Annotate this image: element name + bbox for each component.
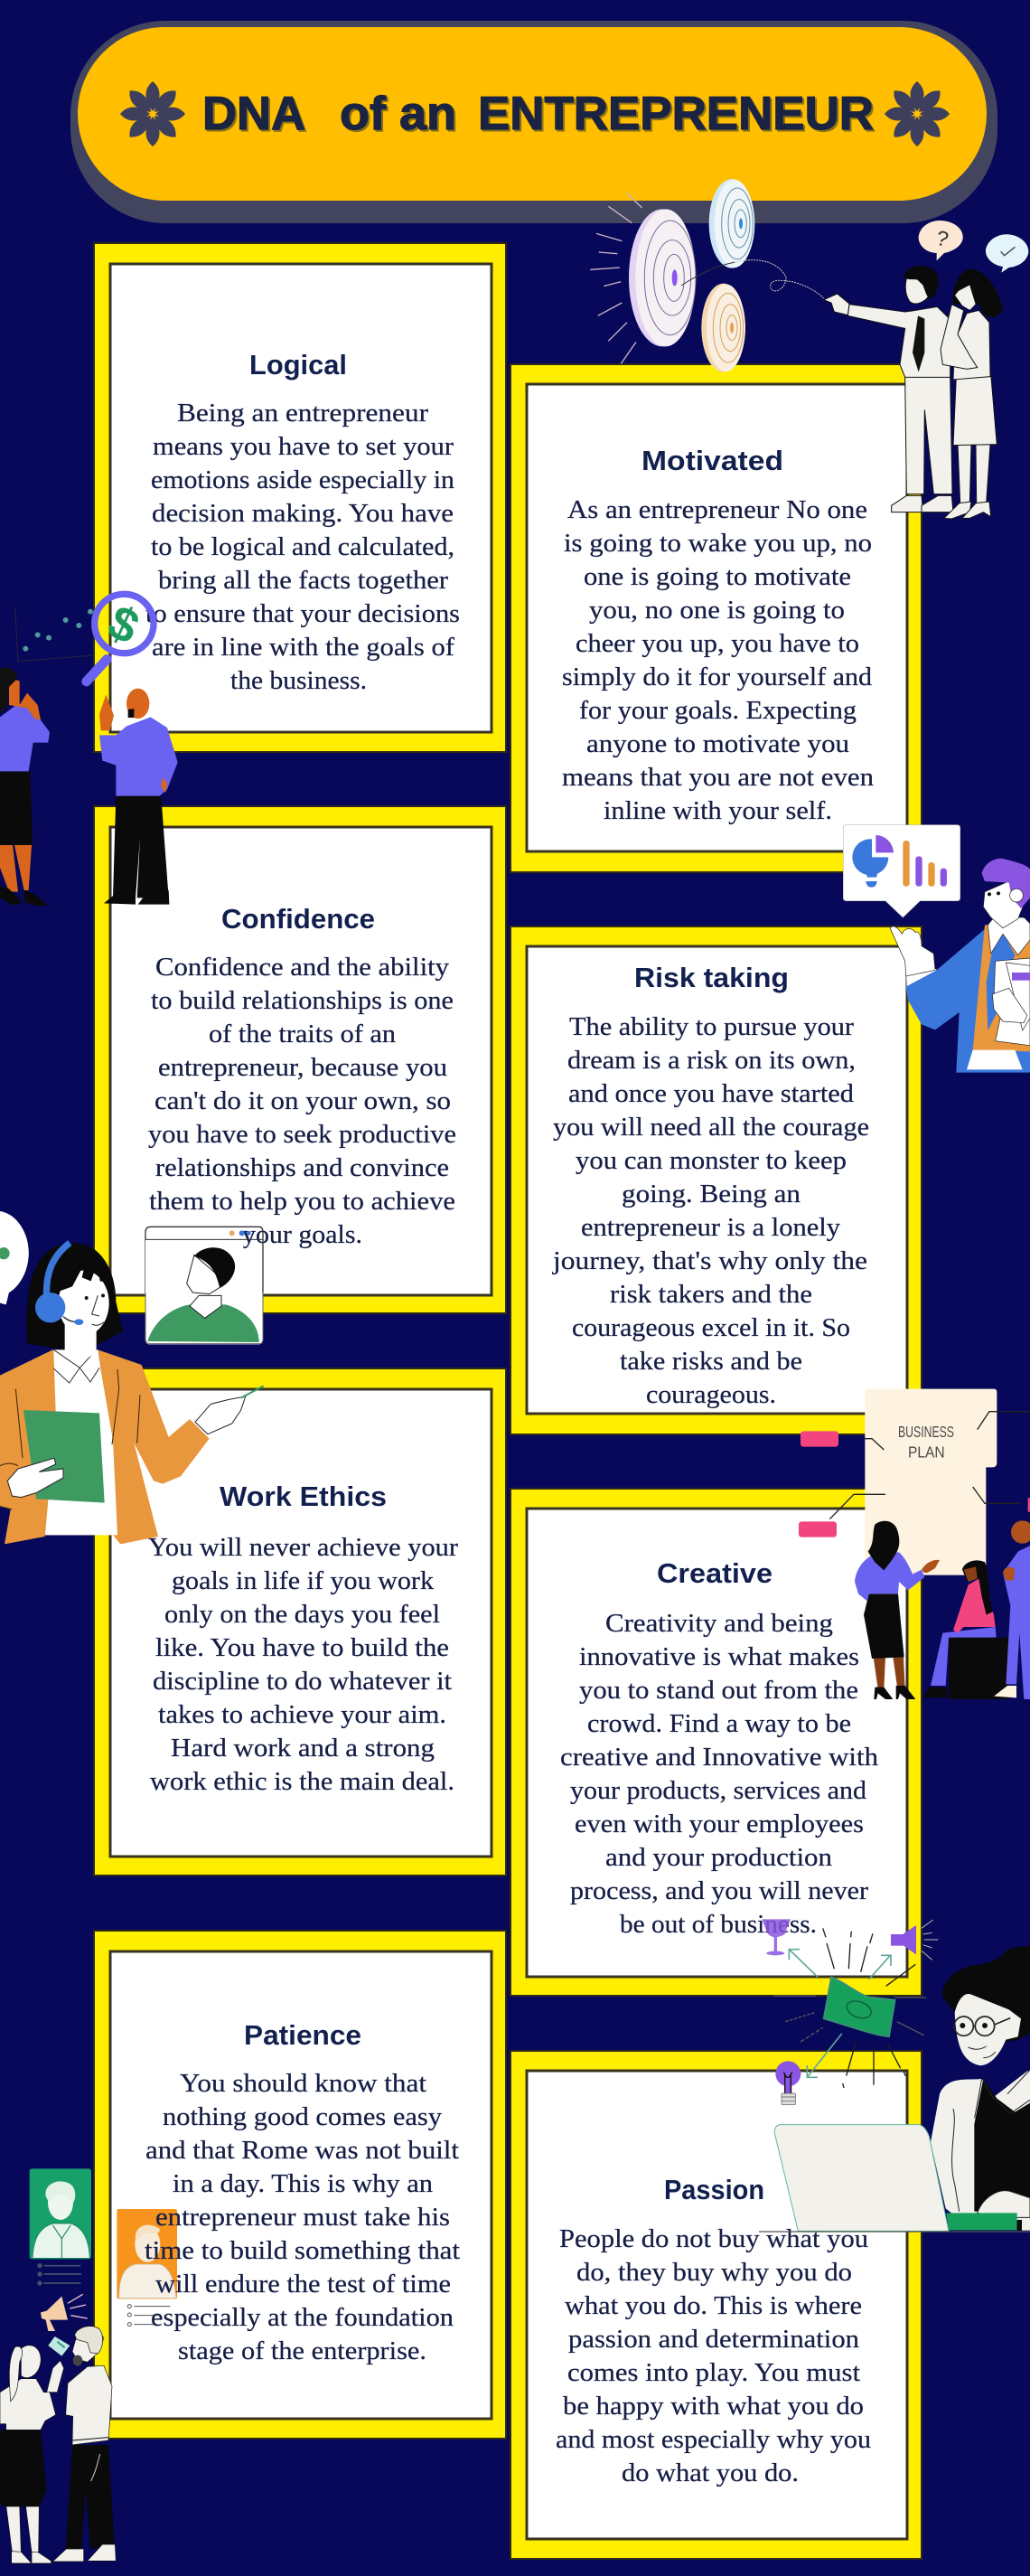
panel: Work Ethics: Hard work and a strong xyxy=(171,1734,435,1763)
seated woman xyxy=(923,1560,1009,1699)
panel: Creative xyxy=(510,1489,922,1996)
panel: Logical: emotions aside especially in xyxy=(151,465,455,494)
panel: Risk taking: going. Being an xyxy=(622,1180,801,1208)
icon: magnifying glass with dollar sign: $ xyxy=(99,596,146,655)
panel: Motivated: you, no one is going to xyxy=(589,596,845,625)
panel: Logical: means you have to set your xyxy=(153,432,454,461)
panel: Work Ethics: goals in life if you work xyxy=(172,1566,435,1595)
woman at laptop xyxy=(931,1946,1030,2221)
video call window xyxy=(145,1227,263,1344)
illustration: targets and two business people pointing xyxy=(590,179,1028,519)
man from behind xyxy=(52,2327,116,2562)
icon: megaphone xyxy=(891,1925,916,1954)
panel: Logical: to be logical and calculated, xyxy=(151,532,454,561)
speech bubble: check mark xyxy=(986,234,1028,273)
panel: Confidence: Confidence and the ability xyxy=(155,953,450,982)
panel: Creative: be out of business. xyxy=(620,1910,817,1939)
panel: Risk taking: journey, that's why only the xyxy=(552,1246,867,1275)
panel: Risk taking: Risk taking xyxy=(634,962,789,993)
panel: Patience: Patience xyxy=(244,2019,361,2051)
panel: Patience: will endure the test of time xyxy=(155,2270,451,2299)
panel: Passion: passion and determination xyxy=(568,2325,860,2354)
icon: megaphone xyxy=(41,2294,88,2331)
illustration: man with data bubble and papers xyxy=(843,825,1030,1073)
panel: Creative: even with your employees xyxy=(575,1810,864,1838)
icon: magnifying glass with dollar sign xyxy=(87,594,154,682)
panel: Confidence: of the traits of an xyxy=(209,1020,397,1048)
speech bubble: question: ? xyxy=(934,226,950,251)
panel: Creative: Creativity and being xyxy=(605,1609,833,1638)
panel: Confidence xyxy=(94,806,506,1313)
panel: Patience: stage of the enterprise. xyxy=(178,2336,426,2365)
panel: Confidence: relationships and convince xyxy=(155,1153,449,1182)
icon: green profile tile xyxy=(30,2168,91,2286)
panel: Motivated: Motivated xyxy=(641,445,783,476)
panel: Patience: time to build something that xyxy=(145,2236,460,2265)
panel: Motivated: As an entrepreneur No one xyxy=(567,495,867,524)
panel: Work Ethics: discipline to do whatever it xyxy=(153,1667,452,1696)
panel: Passion: what you do. This is where xyxy=(565,2291,862,2320)
panel: Passion: do, they buy why you do xyxy=(576,2258,852,2287)
speech bubble: question xyxy=(919,221,963,260)
panel: Passion xyxy=(510,2051,922,2559)
panel: Passion: comes into play. You must xyxy=(567,2358,860,2387)
panel: Creative: and your production xyxy=(605,1843,833,1872)
panel: Motivated: cheer you up, you have to xyxy=(576,629,859,658)
panel: Confidence: your goals. xyxy=(242,1220,362,1249)
panel: Work Ethics xyxy=(94,1368,506,1876)
panel: Motivated: is going to wake you up, no xyxy=(564,529,872,558)
standing woman from behind xyxy=(855,1521,940,1699)
icon: purple wine glass xyxy=(762,1919,791,1955)
panel: Work Ethics: like. You have to build the xyxy=(155,1633,449,1662)
panel: Work Ethics: only on the days you feel xyxy=(164,1600,440,1629)
icon: light bulb xyxy=(775,2061,801,2105)
panel: Risk taking: and once you have started xyxy=(568,1079,855,1108)
panel: Risk taking: you will need all the courage xyxy=(553,1113,869,1142)
panel: Creative: your products, services and xyxy=(570,1776,867,1805)
panel: Work Ethics: Work Ethics xyxy=(220,1481,387,1512)
panel: Creative: Creative xyxy=(657,1557,772,1589)
title banner: of an xyxy=(340,88,456,140)
panel: Risk taking: risk takers and the xyxy=(610,1280,812,1309)
panel: Logical: decision making. You have xyxy=(152,499,454,528)
panel: Work Ethics: work ethic is the main deal. xyxy=(150,1767,454,1796)
panel: Logical: bring all the facts together xyxy=(158,566,448,595)
woman thinking xyxy=(941,269,1003,519)
panel: Patience: especially at the foundation xyxy=(151,2303,454,2332)
panel: Motivated: inline with your self. xyxy=(604,796,832,825)
panel: Passion: Passion xyxy=(664,2174,764,2205)
panel: Work Ethics: You will never achieve your xyxy=(148,1533,458,1562)
illustration: green profile tile and talking couple xyxy=(0,2168,116,2563)
panel: Confidence: can't do it on your own, so xyxy=(154,1086,451,1115)
panel: Creative: process, and you will never xyxy=(570,1876,868,1905)
illustration: headset woman presenting xyxy=(0,1211,264,1544)
illustration: business plan board and team xyxy=(799,1389,1030,1699)
panel: Logical: the business. xyxy=(230,666,367,695)
panel: Confidence: Confidence xyxy=(221,903,375,935)
panel: Creative: crowd. Find a way to be xyxy=(587,1709,851,1738)
title banner: DNA xyxy=(202,88,305,140)
panel: Patience: in a day. This is why an xyxy=(173,2169,434,2198)
panel: Risk taking: dream is a risk on its own, xyxy=(567,1046,856,1075)
woman with blouse xyxy=(0,667,50,907)
business plan board: PLAN xyxy=(908,1443,945,1462)
panel: Confidence: you have to seek productive xyxy=(148,1120,456,1149)
panel: Patience xyxy=(94,1931,506,2439)
panel: Motivated: anyone to motivate you xyxy=(586,729,849,758)
business plan board: BUSINESS xyxy=(898,1423,954,1441)
title banner xyxy=(70,21,997,223)
woman from behind xyxy=(0,2346,64,2563)
panel: Passion: be happy with what you do xyxy=(563,2392,864,2421)
panel: Logical: are in line with the goals of xyxy=(152,633,454,662)
panel: Risk taking xyxy=(510,926,922,1434)
business plan board xyxy=(799,1389,1030,1575)
panel: Logical: Logical xyxy=(249,349,347,381)
icon: orange profile tile xyxy=(117,2209,177,2327)
panel: Confidence: to build relationships is one xyxy=(151,986,454,1015)
panel: Work Ethics: takes to achieve your aim. xyxy=(158,1700,446,1729)
panel: Risk taking: The ability to pursue your xyxy=(569,1012,854,1041)
speech bubble xyxy=(0,1211,29,1304)
title banner: ENTREPRENEUR xyxy=(478,88,874,140)
panel: Motivated: means that you are not even xyxy=(562,763,875,792)
man pointing xyxy=(824,266,953,512)
man with blue shirt xyxy=(99,689,178,905)
illustration: magnifier, chart and two people xyxy=(0,594,178,907)
panel: Risk taking: entrepreneur is a lonely xyxy=(581,1213,841,1242)
panel: Passion: do what you do. xyxy=(622,2458,799,2487)
panel: Motivated: for your goals. Expecting xyxy=(579,696,857,725)
illustration: money, idea icons and woman at laptop xyxy=(759,1920,1030,2232)
panel: Confidence: them to help you to achieve xyxy=(149,1187,455,1216)
panel: Motivated: one is going to motivate xyxy=(584,562,851,591)
panel: Risk taking: you can monster to keep xyxy=(576,1146,847,1175)
standing man xyxy=(994,1520,1030,1699)
panel: Logical: Being an entrepreneur xyxy=(177,399,428,428)
icon: bank note xyxy=(824,1977,895,2036)
panel: Motivated: simply do it for yourself and xyxy=(562,663,873,691)
panel: Risk taking: take risks and be xyxy=(620,1347,802,1376)
icon: ticket xyxy=(48,2336,70,2356)
panel: Passion: and most especially why you xyxy=(556,2425,871,2454)
laptop xyxy=(759,2125,1030,2232)
panel: Passion: People do not buy what you xyxy=(559,2224,868,2253)
panel: Patience: and that Rome was not built xyxy=(145,2136,459,2165)
panel: Patience: nothing good comes easy xyxy=(163,2102,443,2131)
panel: Risk taking: courageous. xyxy=(646,1380,776,1409)
panel: Motivated xyxy=(510,364,922,872)
panel: Creative: innovative is what makes xyxy=(579,1642,859,1671)
panel: Logical xyxy=(94,243,506,752)
icon: chart speech bubble xyxy=(843,825,960,917)
panel: Patience: You should know that xyxy=(180,2069,426,2098)
panel: Logical: to ensure that your decisions xyxy=(145,599,460,628)
panel: Confidence: entrepreneur, because you xyxy=(158,1053,447,1082)
panel: Creative: you to stand out from the xyxy=(579,1676,858,1705)
panel: Risk taking: courageous excel in it. So xyxy=(572,1313,850,1342)
panel: Patience: entrepreneur must take his xyxy=(155,2203,450,2232)
panel: Creative: creative and Innovative with xyxy=(560,1743,879,1772)
woman with headset xyxy=(0,1243,264,1544)
